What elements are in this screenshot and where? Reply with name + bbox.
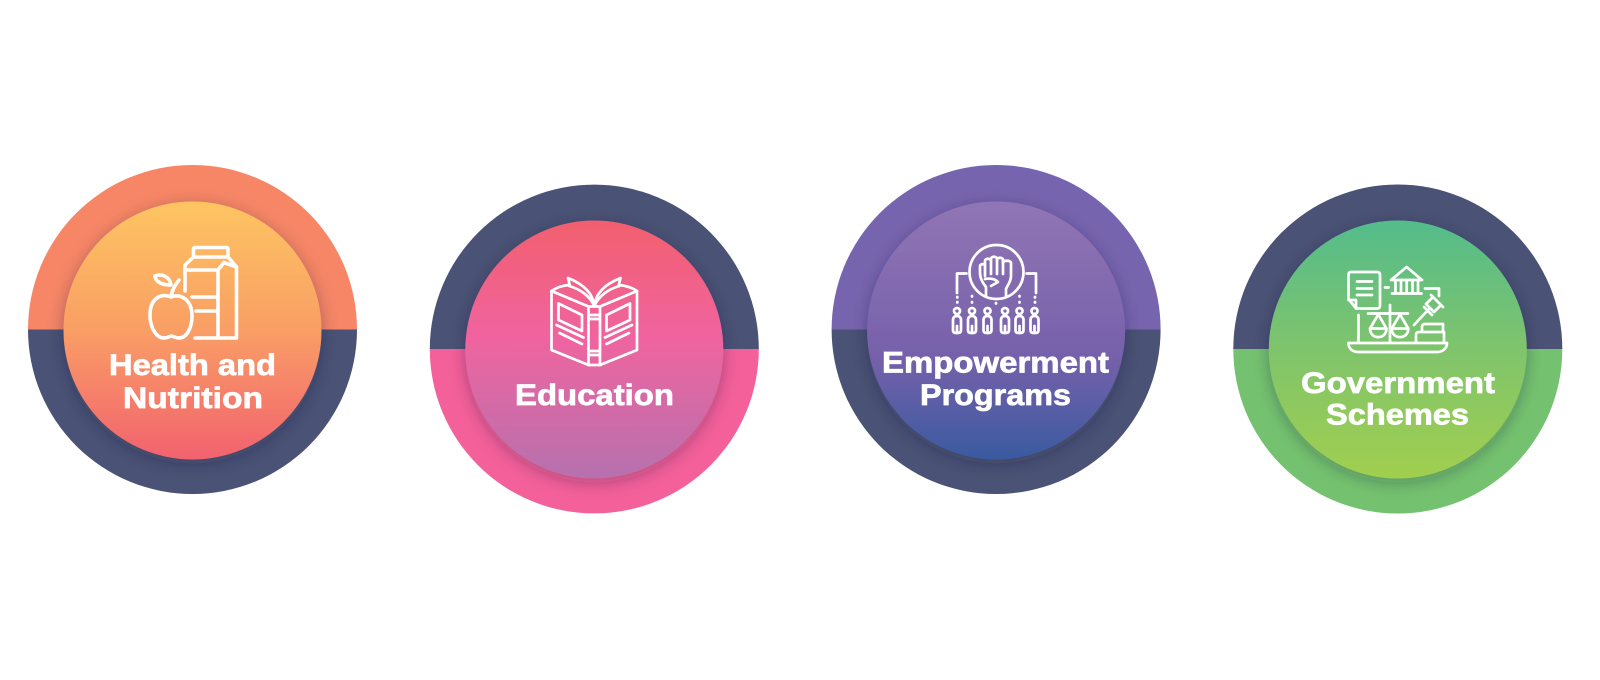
label: empowerment programs: Programs [920, 379, 1071, 412]
icon: apple and milk carton [150, 248, 236, 338]
outer ring: empowerment [832, 165, 1161, 494]
panel: education [430, 185, 759, 513]
panel: health and nutrition [28, 165, 357, 494]
label: government schemes: Schemes [1326, 398, 1469, 432]
label: empowerment programs [882, 346, 1109, 412]
icon: raised fist and people [953, 245, 1038, 333]
panel: empowerment programs [832, 165, 1161, 494]
label: government schemes [1301, 367, 1495, 432]
label: education: Education [515, 379, 674, 412]
label: health and nutrition: Health and [109, 349, 276, 382]
label: empowerment programs: Empowerment [882, 346, 1109, 380]
inner disc: government [1269, 220, 1527, 478]
icon: law, document, courthouse, scales and gavel [1348, 267, 1447, 352]
inner disc: health [64, 202, 322, 460]
label: health and nutrition [109, 349, 276, 415]
outer ring: health [28, 165, 357, 494]
inner disc: education [465, 220, 723, 478]
icon: open book [552, 278, 637, 365]
outer ring: government [1233, 185, 1562, 514]
label: health and nutrition: Nutrition [123, 382, 263, 415]
panel: government schemes [1233, 185, 1562, 514]
label: government schemes: Government [1301, 367, 1495, 400]
inner disc: empowerment [867, 202, 1125, 460]
outer ring: education [430, 185, 759, 513]
